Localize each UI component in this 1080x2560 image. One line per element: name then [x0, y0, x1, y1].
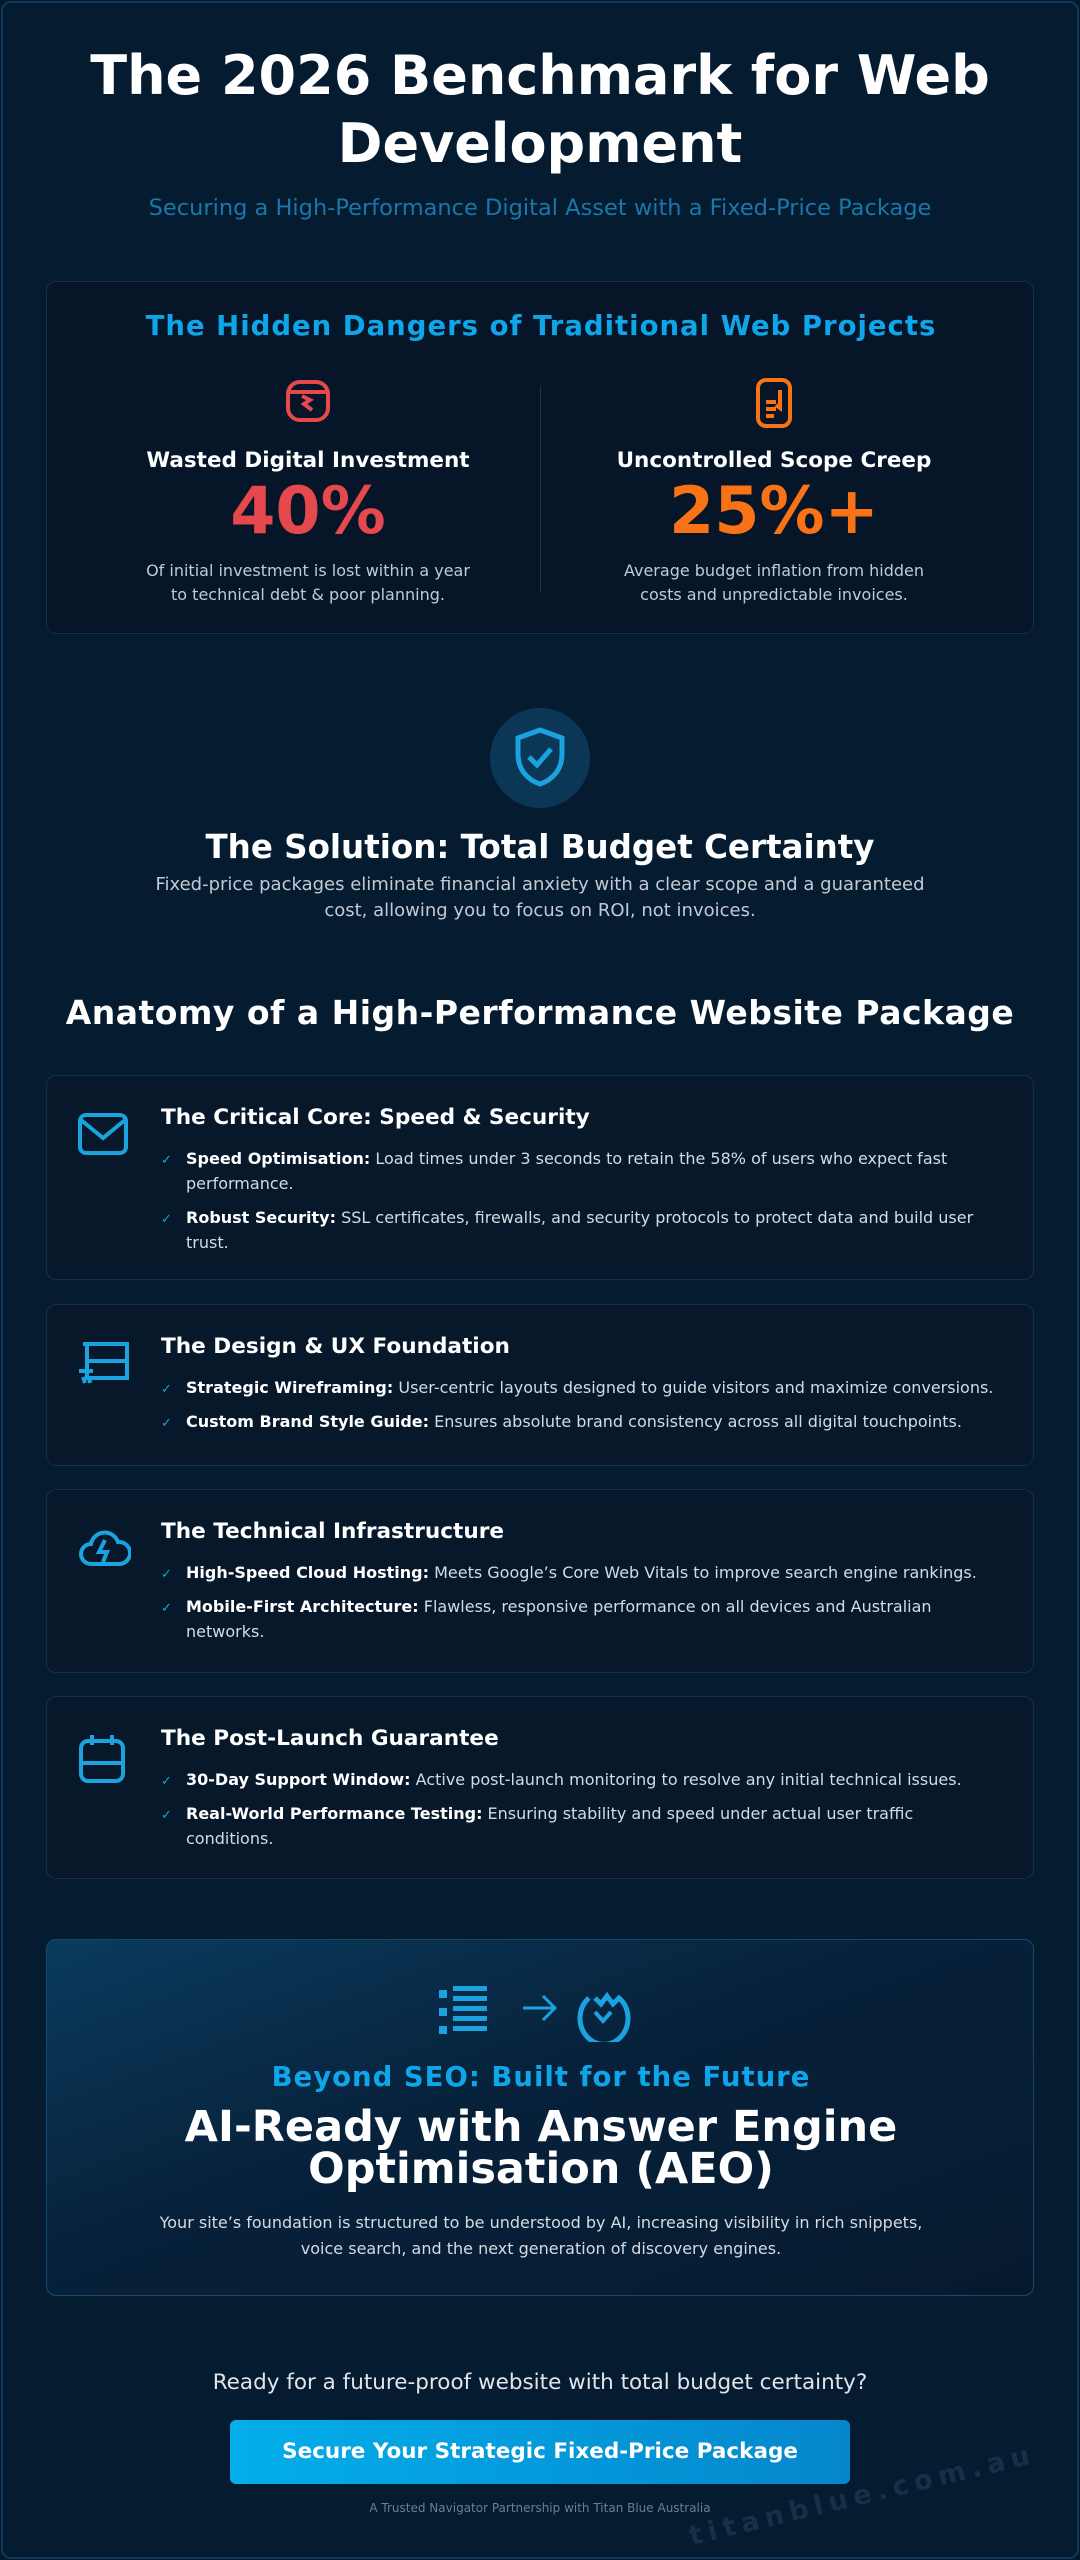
AEO text: voice search, and the next generation of discovery engines. [301, 2239, 781, 2258]
stat: wasted investment: to technical debt & poor planning. [171, 585, 445, 604]
stat: scope creep: Uncontrolled Scope Creep [617, 448, 931, 473]
stat: scope creep [617, 378, 931, 604]
AEO heading [184, 2102, 897, 2194]
icon: cloud bolt [79, 1530, 131, 1566]
card: critical core: Speed Optimisation: Load times under 3 seconds to retain the 58% of users who expect fast performance. [186, 1149, 947, 1193]
CTA button: Secure Your Strategic Fixed-Price Package [282, 2439, 798, 2464]
AEO heading: Optimisation (AEO) [308, 2144, 774, 2194]
icon: calendar [79, 1735, 125, 1783]
card: post-launch: The Post-Launch Guarantee [161, 1726, 499, 1751]
title: Development [338, 112, 742, 175]
card: technical infrastructure: High-Speed Cloud Hosting: Meets Google’s Core Web Vitals to improve search engine rankings. [186, 1563, 977, 1582]
icon: invoice phone [756, 378, 792, 428]
subtitle: Securing a High-Performance Digital Asset with a Fixed-Price Package [149, 195, 931, 221]
stat: scope creep: Average budget inflation from hidden [624, 561, 924, 580]
panel: dangers [46, 281, 1034, 634]
icon: wireframe [79, 1342, 129, 1384]
CTA question: Ready for a future-proof website with total budget certainty? [213, 2370, 867, 2395]
AEO text: Your site’s foundation is structured to be understood by AI, increasing visibility in rich snippets, [160, 2213, 922, 2232]
stat: wasted investment: Wasted Digital Investment [146, 448, 470, 473]
card: technical infrastructure: The Technical Infrastructure [161, 1519, 504, 1544]
card: technical infrastructure [46, 1489, 1034, 1673]
AEO text [160, 2213, 922, 2258]
footer: A Trusted Navigator Partnership with Titan Blue Australia [369, 2501, 711, 2515]
AEO kicker: Beyond SEO: Built for the Future [272, 2061, 810, 2093]
CTA button [230, 2420, 850, 2484]
icon: shield [490, 708, 590, 808]
panel: AEO [46, 1939, 1034, 2296]
panel heading: The Hidden Dangers of Traditional Web Projects [146, 310, 936, 342]
card: critical core [46, 1075, 1034, 1280]
stat: wasted investment [146, 380, 470, 604]
icons: list arrow brain [439, 1986, 630, 2042]
card: design & ux: Strategic Wireframing: User-centric layouts designed to guide visitors and maximize conversions. [186, 1378, 993, 1397]
card: design & ux [46, 1304, 1034, 1466]
AEO heading: AI-Ready with Answer Engine [185, 2102, 897, 2152]
card: post-launch [46, 1696, 1034, 1879]
stat: scope creep: 25%+ [669, 474, 879, 549]
icon: envelope [78, 1113, 128, 1155]
card: critical core: Robust Security: SSL certificates, firewalls, and security protocols to protect data and build user trust. [186, 1208, 973, 1252]
icon: broken wallet [286, 380, 330, 422]
card: post-launch: Real-World Performance Testing: Ensuring stability and speed under actual user traffic [186, 1804, 913, 1823]
card: critical core: The Critical Core: Speed & Security [161, 1105, 590, 1130]
solution heading: The Solution: Total Budget Certainty [206, 828, 874, 866]
solution text: Fixed-price packages eliminate financial anxiety with a clear scope and a guaranteed [155, 874, 925, 895]
title: The 2026 Benchmark for Web [90, 44, 990, 107]
divider [540, 386, 541, 592]
card: design & ux: The Design & UX Foundation [161, 1334, 510, 1359]
stat: wasted investment: Of initial investment is lost within a year [146, 561, 470, 580]
card: design & ux: Custom Brand Style Guide: Ensures absolute brand consistency across all digital touchpoints. [186, 1412, 962, 1431]
watermark: titanblue.com.au [686, 2439, 1039, 2552]
stat: wasted investment: 40% [230, 474, 386, 549]
anatomy heading: Anatomy of a High-Performance Website Package [66, 993, 1014, 1032]
card: technical infrastructure: Mobile-First Architecture: Flawless, responsive performance on all devices and Australian [186, 1597, 932, 1616]
solution text: cost, allowing you to focus on ROI, not invoices. [324, 900, 756, 921]
solution text [155, 874, 925, 921]
card: technical infrastructure: networks. [186, 1622, 264, 1641]
title [90, 44, 990, 175]
card: post-launch: 30-Day Support Window: Active post-launch monitoring to resolve any initial technical issues. [186, 1770, 962, 1789]
card: post-launch: conditions. [186, 1829, 273, 1848]
stat: scope creep: costs and unpredictable invoices. [640, 585, 908, 604]
